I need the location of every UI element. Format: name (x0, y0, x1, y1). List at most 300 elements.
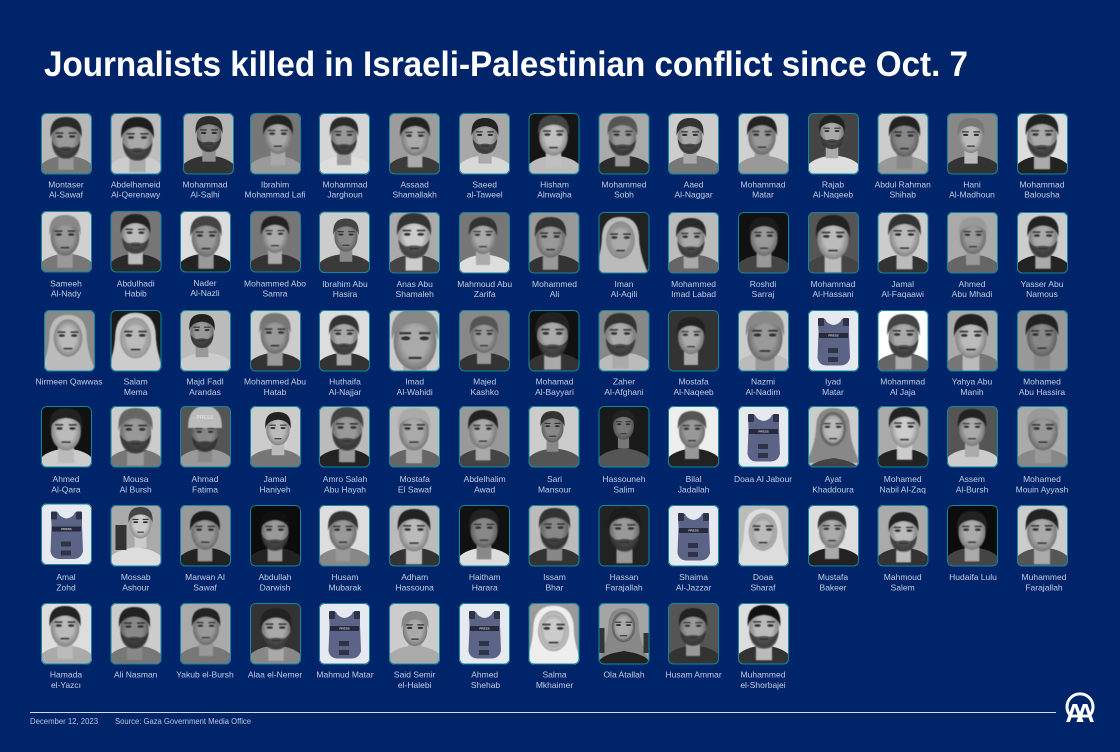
portrait (459, 406, 510, 468)
card: Saeed al-Taweel (459, 113, 510, 200)
portrait (389, 212, 440, 274)
card: Nader Al-Nazli (180, 211, 231, 298)
card: Majd Fadl Arandas (180, 310, 231, 397)
card: Hamada el-Yazcı (41, 603, 92, 690)
card: Mohammad Matar (738, 113, 789, 200)
name: Nader (193, 278, 217, 288)
name: Al-Nazli (190, 288, 220, 298)
card: Abdelhalim Awad (459, 406, 510, 494)
name: Arandas (189, 387, 221, 397)
card: Mohammad Al Jaja (878, 310, 928, 397)
name: Salem (891, 582, 915, 592)
card: Mahmud Matar (316, 603, 374, 679)
card: Doaa Sharaf (733, 505, 793, 592)
name: Yakub el-Bursh (176, 669, 234, 679)
press vest: PRESS (828, 334, 839, 338)
card: Ibrahim Abu Hasira (319, 212, 370, 299)
name: Salam (124, 376, 148, 386)
card: Mohammed Imad Labad (668, 212, 719, 299)
name: Amro Salah (323, 474, 367, 484)
name: Al-Bursh (956, 484, 989, 494)
card: Yahya Abu Manih (947, 310, 998, 397)
card: Ahmed Abu Mhadi (947, 212, 998, 299)
portrait (598, 505, 650, 567)
name: Ibrahim Abu (322, 279, 368, 289)
portrait (250, 113, 301, 175)
card: Husam Mubarak (319, 505, 370, 592)
card: Issam Bhar (528, 505, 580, 592)
name: Mahmud Matar (316, 669, 374, 679)
portrait (319, 505, 370, 567)
name: Yasser Abu (1021, 279, 1064, 289)
name: Assem (959, 474, 985, 484)
title: Journalists killed in Israeli-Palestinian conflict since Oct. 7 (44, 45, 968, 84)
name: Adham (401, 572, 428, 582)
card: Aaed Al-Naggar (668, 113, 719, 200)
name: Husam (332, 572, 358, 582)
card: Mostafa El Sawaf (389, 406, 440, 494)
press vest: PRESS (339, 627, 350, 631)
name: Al Jaja (890, 387, 916, 397)
portrait (668, 603, 719, 665)
name: Abu Hayah (324, 484, 366, 494)
name: Muhammed (1022, 572, 1067, 582)
name: Mohammad (1020, 179, 1065, 189)
name: Matar (822, 387, 844, 397)
portrait (38, 310, 98, 375)
portrait (250, 406, 301, 468)
card: Mohamed Nabil Al-Zaq (878, 406, 928, 494)
card: Jamal Haniyeh (250, 406, 301, 494)
name: Rajab (822, 179, 844, 189)
card: Muhammed el-Shorbajei (738, 603, 789, 690)
name: Zohd (56, 582, 76, 592)
name: Shaima (679, 572, 708, 582)
name: Sari (547, 474, 562, 484)
name: Hasira (333, 289, 358, 299)
name: Awad (474, 484, 496, 494)
name: Anas Abu (397, 279, 433, 289)
portrait (668, 406, 719, 468)
card: Husam Ammar (665, 603, 722, 679)
name: Yahya Abu (952, 376, 993, 386)
name: al-Taweel (467, 190, 503, 200)
name: Al-Hassani (812, 289, 854, 299)
name: Mustafa (818, 572, 848, 582)
card: Mossab Ashour (110, 505, 162, 592)
name: Mkhaimer (536, 680, 573, 690)
card: Iyad Matar (808, 310, 859, 397)
portrait (808, 113, 859, 175)
name: Al-Najjar (329, 387, 361, 397)
card: Mohammed Sobh (598, 113, 650, 200)
card: Hassouneh Salim (598, 406, 650, 494)
card: Mahmoud Abu Zarifa (457, 212, 512, 299)
portrait (668, 212, 719, 274)
name: Al-Naqeeb (813, 190, 853, 200)
name: Amal (56, 572, 76, 582)
name: Mostafa (400, 474, 430, 484)
name: Majed (473, 376, 497, 386)
name: Mohammad (811, 279, 856, 289)
footer source: Source: Gaza Government Media Office (115, 717, 252, 726)
name: Nazmi (751, 376, 775, 386)
name: Bilal (686, 474, 702, 484)
portrait (103, 310, 168, 379)
portrait (738, 603, 789, 665)
name: Mossab (121, 572, 151, 582)
name: Mohammad (323, 179, 368, 189)
card: Roshdi Sarraj (738, 212, 789, 299)
name: Hamada (50, 669, 82, 679)
card: Majed Kashko (459, 310, 510, 397)
portrait (250, 603, 301, 665)
portrait (1017, 212, 1068, 274)
card: Alaa el-Nemer (248, 603, 302, 679)
card: Muhammed Farajallah (1017, 505, 1068, 592)
card: Iman Al-Aqili (591, 212, 650, 299)
name: Sawaf (193, 582, 217, 592)
name: Mohammad Lafi (245, 190, 306, 200)
card: Mustafa Bakeer (808, 505, 859, 592)
portrait (878, 505, 928, 567)
portrait (878, 310, 928, 372)
portrait (459, 212, 510, 274)
name: Mohamed (884, 474, 922, 484)
name: Ashour (122, 582, 149, 592)
portrait (738, 212, 789, 274)
portrait (528, 406, 580, 468)
portrait (183, 113, 234, 175)
portrait (180, 310, 231, 372)
name: Al-Aqili (611, 289, 637, 299)
name: Iman (615, 279, 634, 289)
name: Harara (472, 582, 498, 592)
name: Jarghoun (327, 190, 363, 200)
name: Ayat (825, 474, 842, 484)
card: Yasser Abu Namous (1017, 212, 1068, 299)
name: Mohammad (741, 179, 786, 189)
portrait (110, 603, 162, 665)
portrait (389, 309, 440, 388)
card: Assaad Shamallakh (389, 113, 440, 200)
card: Anas Abu Shamaleh (389, 212, 440, 299)
name: Sharaf (750, 582, 776, 592)
portrait (598, 113, 650, 175)
name: Matar (752, 190, 774, 200)
name: Issam (543, 572, 566, 582)
portrait (1017, 310, 1068, 372)
name: Ahmed (471, 669, 498, 679)
card: Abdulhadi Habib (110, 211, 162, 298)
card: Abdul Rahman Shihab (875, 113, 931, 200)
icon: AA logo: AA (1066, 698, 1095, 728)
card: Shaima Al-Jazzar (668, 505, 719, 592)
portrait (389, 603, 440, 665)
name: el-Yazcı (51, 680, 81, 690)
card: Salam Mema (103, 310, 168, 397)
name: Zarifa (474, 289, 496, 299)
name: Husam Ammar (665, 669, 722, 679)
portrait (947, 212, 998, 274)
name: Al-Nady (51, 288, 82, 298)
portrait (110, 406, 162, 468)
press vest: PRESS (61, 527, 72, 531)
name: El Sawaf (398, 484, 432, 494)
card: Mohamed Abu Hassira (1017, 310, 1068, 397)
name: Mostafa (678, 376, 709, 386)
name: Haitham (469, 572, 501, 582)
card: Montaser Al-Sawaf (41, 113, 92, 200)
name: Sameeh (50, 278, 82, 288)
name: Ola Atallah (603, 669, 645, 679)
portrait (41, 211, 92, 273)
name: Abdul Rahman (875, 179, 931, 189)
name: Abdullah (258, 572, 292, 582)
card: Adham Hassouna (389, 505, 440, 592)
portrait (41, 113, 92, 175)
portrait (41, 406, 92, 468)
name: Mouin Ayyash (1016, 484, 1069, 494)
name: Saeed (472, 179, 497, 189)
name: Al-Salhi (190, 190, 220, 200)
card: Ola Atallah (598, 603, 650, 679)
name: Hassouneh (602, 474, 646, 484)
portrait (878, 212, 928, 274)
name: Sarraj (752, 289, 774, 299)
card: Ibrahim Mohammad Lafi (245, 113, 306, 200)
name: Salim (613, 484, 635, 494)
name: Iyad (825, 376, 841, 386)
name: Nirmeen Qawwas (35, 376, 103, 386)
name: Samra (262, 288, 288, 298)
portrait (389, 406, 440, 468)
portrait (878, 113, 928, 175)
portrait (528, 310, 580, 372)
name: Abdelhameid (111, 179, 161, 189)
portrait (180, 603, 231, 665)
name: Namous (1026, 289, 1058, 299)
portrait (808, 505, 859, 567)
name: Majd Fadl (186, 376, 224, 386)
portrait (110, 113, 162, 175)
name: Al-Wahidi (397, 387, 433, 397)
portrait (947, 310, 998, 372)
portrait (459, 113, 510, 175)
portrait (319, 113, 370, 175)
card: Mohammed Abo Samra (244, 211, 306, 298)
name: Al-Naqeeb (674, 387, 714, 397)
card: Mohamed Mouin Ayyash (1016, 406, 1069, 494)
name: Manih (960, 387, 984, 397)
name: Mohamed (1023, 474, 1061, 484)
card: Zaher Al-Afghani (598, 310, 650, 397)
name: Al-Qara (51, 484, 81, 494)
name: Al-Faqaawi (881, 289, 924, 299)
name: Al-Nadim (746, 387, 780, 397)
portrait (528, 212, 580, 274)
card: Mohammed Ali (528, 212, 580, 299)
name: Jamal (891, 279, 914, 289)
portrait (598, 603, 650, 671)
portrait (947, 113, 998, 175)
name: Hassan (610, 572, 639, 582)
name: Mansour (538, 484, 571, 494)
card: Hudaifa Lulu (947, 505, 998, 582)
portrait (250, 211, 301, 273)
name: Jamal (264, 474, 286, 484)
name: Haniyeh (259, 484, 291, 494)
name: el-Shorbajei (740, 680, 786, 690)
name: Al-Afghani (604, 387, 644, 397)
name: Hani (963, 179, 981, 189)
name: Shihab (889, 190, 916, 200)
portrait (521, 603, 586, 672)
name: Bhar (546, 582, 564, 592)
footer date: December 12, 2023 (30, 717, 99, 726)
name: Marwan Al (185, 572, 225, 582)
name: Ahmed (53, 474, 80, 484)
name: Salma (542, 669, 567, 679)
portrait grid (35, 113, 1069, 690)
portrait (738, 113, 789, 175)
name: Mohammed (671, 279, 716, 289)
name: Al-Bayyari (535, 387, 574, 397)
name: Kashko (471, 387, 499, 397)
name: Ahmad (192, 474, 219, 484)
name: Habib (125, 288, 147, 298)
portrait (668, 310, 719, 372)
portrait (180, 505, 231, 567)
portrait (668, 113, 719, 175)
portrait (180, 211, 231, 273)
card: Marwan Al Sawaf (180, 505, 231, 592)
name: Mohammed (602, 179, 647, 189)
card: Haitham Harara (459, 505, 510, 592)
card: Assem Al-Bursh (947, 406, 998, 494)
card: Hani Al-Madhoun (947, 113, 998, 200)
name: Muhammed (741, 669, 786, 679)
name: Imad Labad (671, 289, 716, 299)
name: Doaa Al Jabour (734, 474, 792, 484)
name: Farajallah (1025, 582, 1063, 592)
portrait (1017, 113, 1068, 175)
name: Said Semir (394, 669, 436, 679)
portrait (528, 505, 580, 567)
portrait (110, 211, 162, 273)
card: Doaa Al Jabour (734, 406, 792, 484)
name: Mohammad (183, 179, 228, 189)
card: Hisham Alnwajha (528, 113, 580, 200)
icon: AA logo (1066, 694, 1095, 728)
name: Shamallakh (392, 190, 437, 200)
portrait (459, 505, 510, 567)
name: el-Halebi (398, 680, 432, 690)
card: Hassan Farajallah (598, 505, 650, 592)
portrait (459, 310, 510, 372)
card: Bilal Jadallah (668, 406, 719, 494)
name: Sobh (614, 190, 634, 200)
portrait (250, 310, 301, 372)
name: Alnwajha (537, 190, 572, 200)
card: Said Semir el-Halebi (389, 603, 440, 690)
card: Amal Zohd (41, 504, 92, 592)
portrait (319, 212, 370, 274)
name: Imad (405, 376, 424, 386)
portrait (598, 310, 650, 372)
portrait (319, 406, 370, 468)
name: Mubarak (328, 582, 362, 592)
name: Darwish (260, 582, 291, 592)
name: Mohammad (880, 376, 925, 386)
card: Mohamad Al-Bayyari (528, 310, 580, 397)
portrait (591, 212, 650, 277)
portrait (947, 406, 998, 468)
card: Sameeh Al-Nady (41, 211, 92, 298)
name: Hudaifa Lulu (949, 572, 997, 582)
card: Mohammed Abu Hatab (244, 310, 306, 397)
name: Mohammed Abu (244, 376, 306, 386)
card: Sari Mansour (528, 406, 580, 494)
name: Alaa el-Nemer (248, 669, 302, 679)
name: Balousha (1024, 190, 1060, 200)
card: Imad Al-Wahidi (389, 309, 440, 397)
card: Ahmed Al-Qara (41, 406, 92, 494)
portrait (1017, 406, 1068, 468)
portrait (528, 113, 580, 175)
card: Nirmeen Qawwas (35, 310, 103, 386)
name: Mohamad (536, 376, 574, 386)
card: Salma Mkhaimer (521, 603, 586, 690)
name: Ali Nasman (114, 669, 158, 679)
name: Mohamed (1023, 376, 1061, 386)
name: Mohammed (532, 279, 577, 289)
name: Khaddoura (812, 484, 854, 494)
card: Mohammad Al-Salhi (183, 113, 234, 200)
portrait (733, 505, 793, 569)
card: Ahmad Fatima (180, 406, 231, 494)
card: Yakub el-Bursh (176, 603, 234, 679)
card: Jamal Al-Faqaawi (878, 212, 928, 299)
portrait (389, 113, 440, 175)
name: Fatima (192, 484, 218, 494)
card: Mousa Al Bursh (110, 406, 162, 494)
name: Mahmoud (884, 572, 922, 582)
name: Abu Hassira (1019, 387, 1065, 397)
name: Montaser (48, 179, 84, 189)
portrait (878, 406, 928, 468)
portrait (947, 505, 998, 567)
name: Abdelhalim (464, 474, 506, 484)
name: Al-Madhoun (949, 190, 995, 200)
portrait (41, 603, 92, 665)
portrait (319, 310, 370, 372)
card: Abdullah Darwish (250, 505, 301, 592)
name: Mema (124, 387, 148, 397)
name: Huthaifa (329, 376, 361, 386)
portrait (806, 406, 860, 478)
portrait (389, 505, 440, 567)
name: Ali (550, 289, 559, 299)
card: Nazmi Al-Nadim (738, 310, 789, 397)
name: Abu Mhadi (952, 289, 992, 299)
portrait (598, 406, 650, 468)
card: Amro Salah Abu Hayah (319, 406, 370, 494)
card: Rajab Al-Naqeeb (808, 113, 859, 200)
name: Hisham (540, 179, 569, 189)
card: Mostafa Al-Naqeeb (668, 310, 719, 397)
name: Al-Jazzar (676, 582, 711, 592)
